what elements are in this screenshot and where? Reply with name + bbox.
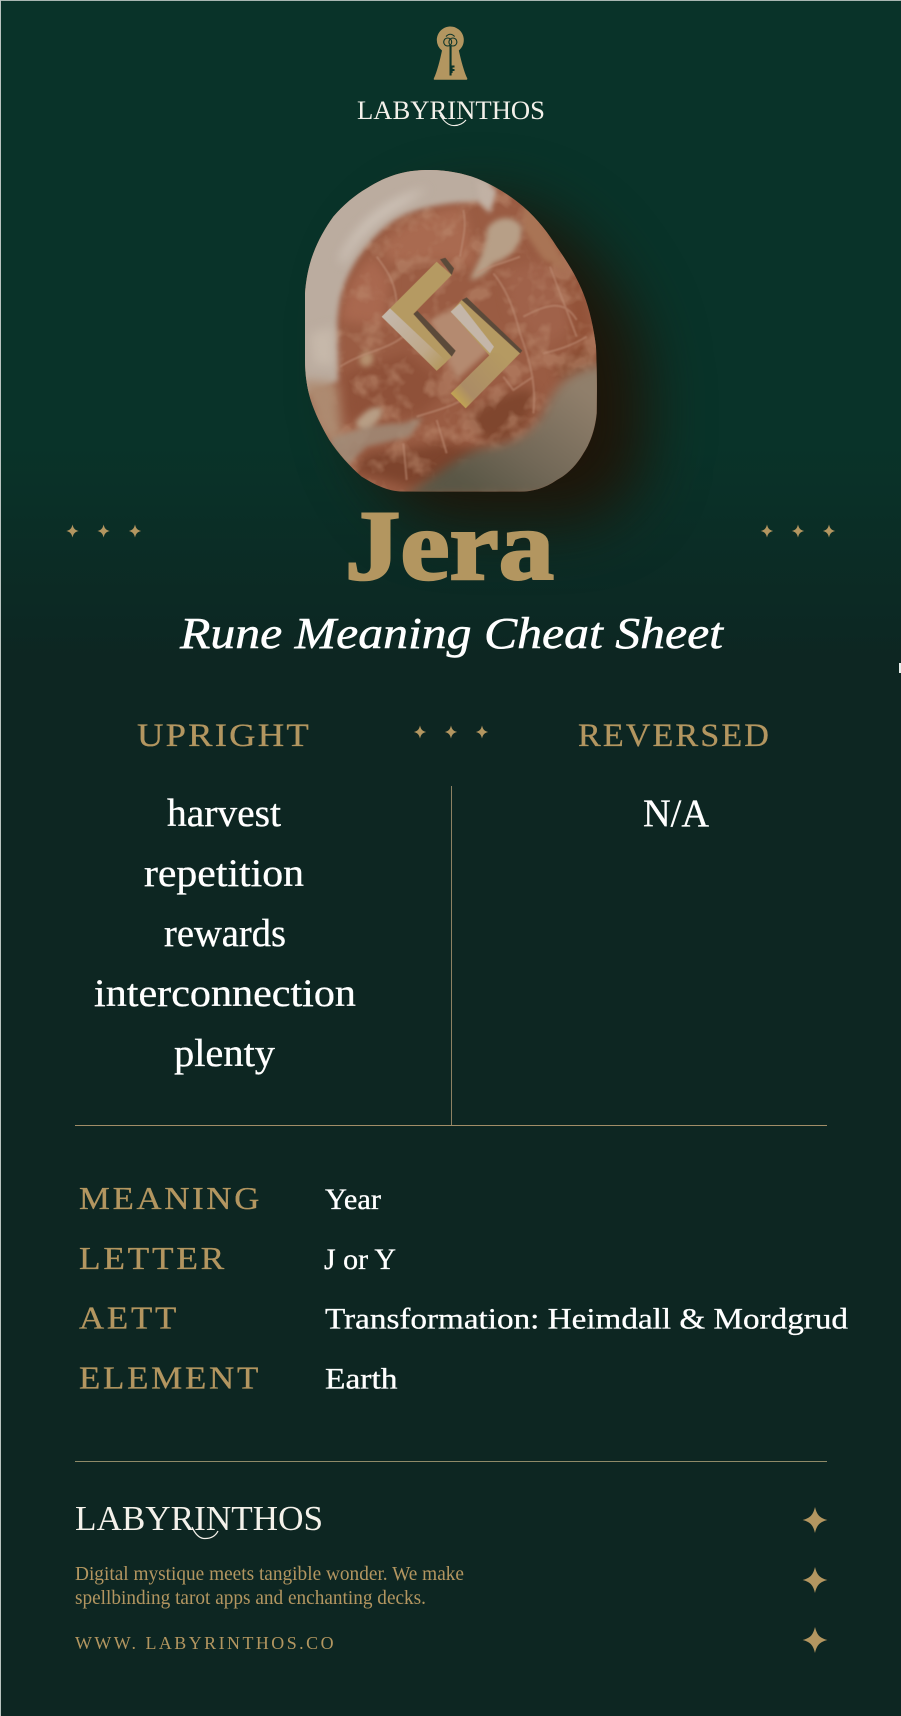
- pale patches between the rune strokes: [430, 203, 567, 380]
- details table: AETT: [79, 1300, 179, 1336]
- footer url: WWW. LABYRINTHOS.CO: [75, 1633, 336, 1653]
- footer wordmark: LABYRINTHOS: [75, 1499, 323, 1538]
- left edge strip: [0, 0, 1, 1716]
- details table: Transformation: Heimdall & Mordgrud: [325, 1303, 848, 1336]
- stars: centre: [414, 726, 488, 738]
- logo: keyhole and key: [434, 27, 467, 80]
- reversed keywords: N/A: [643, 792, 709, 835]
- rune stone: Jera: [305, 170, 597, 492]
- details table: J or Y: [324, 1243, 396, 1276]
- rim highlights: [306, 192, 417, 448]
- upright keywords: harvest: [167, 792, 281, 835]
- rune stone shadow: [355, 202, 647, 524]
- pale rim of stone: [305, 170, 494, 395]
- details table: LETTER: [79, 1240, 227, 1276]
- footer description: [75, 1564, 464, 1609]
- lower grey band: [403, 363, 607, 497]
- upright keywords: rewards: [164, 912, 286, 955]
- upright keywords: repetition: [144, 852, 304, 895]
- divider: [75, 1461, 827, 1462]
- heading: upright: UPRIGHT: [137, 718, 311, 754]
- title: Jera: Jera: [345, 490, 554, 601]
- stars: left: [66, 524, 141, 538]
- details table: Earth: [325, 1363, 398, 1396]
- upright keywords: plenty: [174, 1032, 276, 1075]
- heading: reversed: REVERSED: [578, 718, 771, 754]
- upright keywords: [94, 792, 356, 1075]
- details table: MEANING: [79, 1180, 262, 1216]
- marbled mottling: [303, 170, 600, 493]
- subtitle: Rune Meaning Cheat Sheet: [179, 609, 725, 658]
- pale blotches: [330, 180, 522, 467]
- stars: right: [761, 524, 835, 538]
- column divider: [451, 786, 452, 1125]
- footer stars: [803, 1507, 827, 1653]
- footer description: spellbinding tarot apps and enchanting decks.: [75, 1588, 426, 1609]
- upright keywords: interconnection: [94, 972, 356, 1015]
- details table: [79, 1180, 848, 1396]
- details table: Year: [325, 1183, 381, 1216]
- details table: ELEMENT: [79, 1360, 261, 1396]
- divider: [75, 1125, 827, 1126]
- top edge strip: [0, 0, 901, 1]
- right edge notch: [899, 663, 901, 673]
- logo: wordmark: LABYRINTHOS: [357, 96, 545, 125]
- rune glyph: [382, 258, 522, 408]
- veins: [340, 210, 587, 480]
- footer description: Digital mystique meets tangible wonder. We make: [75, 1564, 464, 1585]
